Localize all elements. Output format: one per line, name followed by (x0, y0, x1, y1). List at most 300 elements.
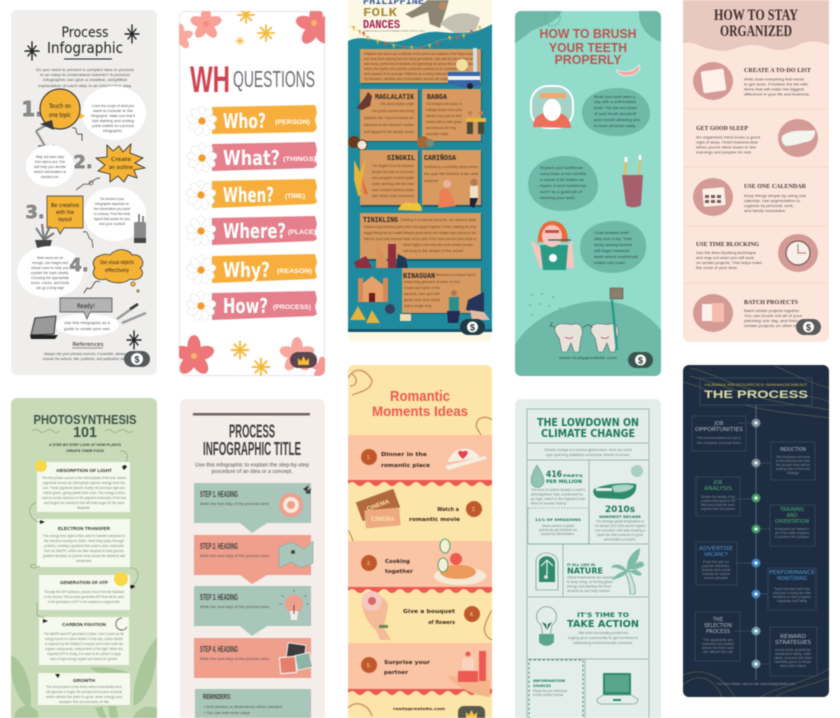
step 3: Write the next step of the process here. (200, 605, 270, 609)
step: performance monitoring: Track how well each new (774, 587, 810, 591)
footer credit: For more details, visit our site www.reallygreatsite.com (717, 682, 795, 686)
item: time blocking: USE TIME BLOCKING (696, 241, 759, 248)
title: how to stay organized: ORGANIZED (720, 23, 792, 40)
step: electron transfer: gradient develops as protons move across the thylakoid wall (43, 554, 125, 558)
step 1 (21, 86, 146, 146)
step: growth: GROWTH (73, 678, 95, 683)
step 1: one topic (49, 112, 71, 119)
step 1: 1. (21, 97, 43, 121)
references: References (72, 342, 104, 348)
badge: crown (290, 352, 317, 368)
step 1: Touch on (48, 103, 71, 110)
box: singkil: people and tells of a princess (372, 170, 414, 174)
item: batch projects: You can knock out all of your (744, 314, 803, 318)
row: why (186, 254, 317, 285)
title: photosynthesis 101: 101 (73, 425, 97, 441)
step: generation of atp: Through the ATP synthase, protons move from the thylakoid (44, 590, 124, 594)
box: intro: and music, performed at festivals and gatherings all across the beautiful islands (364, 62, 476, 66)
step: job analysis: expects from the person (701, 507, 735, 511)
step 2: essential to use. (41, 175, 59, 179)
box: binasuan (402, 268, 490, 323)
item: batch projects: Batch similar projects together. (744, 309, 800, 313)
decor: squiggles (348, 370, 492, 716)
step 1: Learn the scope of what you (92, 104, 134, 108)
node connectors (732, 423, 771, 664)
row: how (186, 291, 317, 321)
box: intro (360, 48, 482, 89)
step: growth: The end product of the fixed carbon eventually turns (46, 685, 122, 689)
step: carbon fixation: sets of high-energy sugars and stored for growth. (50, 657, 118, 661)
it all lies in nature: energy and planting the trees (567, 584, 611, 588)
box: intro: who have been dancing them for many generations, each with its own regional story (364, 57, 476, 61)
row: where: Where? (223, 219, 286, 243)
step: training and orientation: AND (786, 513, 798, 519)
step 1: infographic. Make sure that it (91, 114, 135, 118)
step: job analysis: position that needs to be (701, 499, 735, 503)
step: growth: into glucose or sugar, the primary food source of plants (46, 690, 122, 694)
step: brush twice (582, 88, 650, 136)
stat: 2010s: the decade 2010-2019 was the highest (595, 524, 645, 528)
row dividers (683, 109, 829, 283)
stat: 2010s: The average global temperature in (596, 520, 644, 524)
icon: bearded man (531, 86, 573, 128)
step 1 (194, 483, 311, 533)
it all lies in nature: NATURE (567, 566, 603, 576)
box: binasuan: great care and rarely (404, 298, 440, 302)
box: singkil: SINGKIL (387, 155, 415, 163)
title: philippine folk dances: Traditional dances from the Philippine islands and their stories (363, 30, 426, 32)
step: generation of atp: to the stroma. This process generates ATP that will be used (44, 595, 124, 599)
intro text: explanation of each step in an informative way. (38, 84, 132, 88)
box: singkil: with heavy royal ornaments (372, 194, 414, 198)
timeline spine (755, 405, 757, 680)
step 3: with the (56, 210, 74, 216)
step: the selection process (695, 612, 740, 661)
box: binasuan: spill a single drop (404, 304, 432, 308)
panel: photosynthesis 101 (11, 398, 157, 718)
bunting (350, 26, 481, 51)
information sources: INFORMATION (533, 679, 565, 683)
step: job analysis: Review the details of the (701, 495, 735, 499)
item 4: Give a bouquet (403, 609, 456, 615)
row: how: How? (223, 294, 268, 318)
step: training and orientation: to perform the position (775, 535, 809, 539)
decor: bottom flowers (178, 334, 326, 377)
item 1 band: 1. (367, 455, 371, 461)
step 4: Write the next step of the process here. (200, 657, 270, 661)
subtitle (195, 462, 309, 475)
item: one calendar (693, 178, 806, 216)
step 4: Choosing the appropriate (31, 276, 69, 280)
item 3 band: together (385, 569, 414, 575)
badge: dollar: $ (134, 354, 140, 364)
it all lies in nature: IT ALL LIES IN (567, 562, 595, 567)
item: batch projects: planning one day, and then do (744, 319, 804, 323)
step 4: enough, use images and (32, 261, 68, 265)
step: the selection process: reviewed and tested (702, 642, 734, 646)
background: bottom hill (515, 301, 661, 376)
stat: 2010s: ever recorded, with data showing a (595, 528, 645, 532)
step: generation of atp: in the generation of ATP in the reactions to support later (48, 600, 121, 604)
item 5 band: 5. (367, 663, 371, 669)
it all lies in nature: to keep rising, so turning green (567, 580, 613, 584)
step: clean between teeth: daily once a day. Tooth (594, 237, 632, 241)
item: batch projects: certain projects on other days. (744, 324, 804, 328)
intro text: infographic can give a creative, simplified (43, 78, 127, 82)
step: absorption of light: pigments known as chlorophyll capture energy from the (43, 481, 125, 485)
step 4: Use visual objects (100, 260, 134, 266)
step: carbon fixation: is captured by the RuBisCO enzyme and is then built into (45, 642, 123, 646)
title: process infographic: Process (62, 25, 108, 41)
step: job analysis: JOB (713, 480, 723, 486)
subtitle: Use this infographic to explain the step-by-step (195, 462, 309, 468)
item 4: of flowers (428, 620, 455, 626)
stat: 2010s: rapid rise that continues to grow (597, 533, 643, 537)
step: carbon fixation: energy source for carbon fixation. In this step, carbon dioxide (45, 637, 123, 641)
icon: laptop (597, 673, 638, 704)
item: to-do list: CREATE A TO-DO LIST (744, 67, 812, 74)
box: singkil: The Singkil is from the Maranao (372, 164, 414, 168)
item: good sleep: night of sleep. Finish business-time (696, 140, 758, 144)
box: binasuan: dancers, who spin with (404, 292, 440, 296)
title: how to brush your teeth properly: PROPERLY (554, 52, 622, 67)
box: banga: Kalinga women who carry (426, 108, 462, 112)
panel: philippine folk dances (348, 0, 492, 342)
item: batch projects (693, 294, 804, 332)
reminders box (195, 689, 311, 718)
row: who: Who? (223, 109, 266, 133)
step: electron transfer: membrane. (76, 559, 92, 563)
step: absorption of light: used to excite electrons in the pigment molecules of the leaf (42, 496, 126, 500)
step: job opportunities: OPPORTUNITIES (695, 427, 743, 433)
title: photosynthesis 101: PHOTOSYNTHESIS (34, 412, 137, 427)
step: carbon fixation: organic compounds, independent of the light. When the (45, 647, 123, 651)
stat: 416 ppm: The level of carbon dioxide in earth's (531, 488, 585, 492)
take action: Take action by educating yourself and (578, 631, 628, 635)
step: absorption of light: itself. (77, 506, 91, 510)
box: carinosa: CARIÑOSA (424, 154, 457, 163)
step: advertise vacancy: more people (704, 576, 728, 580)
row: when: (TIME) (285, 194, 305, 200)
title: process infographic: Infographic (47, 39, 123, 57)
item: batch projects: BATCH PROJECTS (744, 299, 798, 306)
step: performance monitoring: regularly and fairly (777, 599, 807, 603)
step: electron transfer: the electron transport chain. Here they pass through (44, 539, 124, 543)
step: training and orientation: ORIENTATION (775, 519, 809, 525)
box: carinosa: handkerchief (424, 179, 438, 183)
step: job analysis: filled and what the team (701, 503, 735, 507)
step: the selection process: are offered the role (703, 650, 733, 654)
closing: ready callout: Ready! (77, 303, 95, 310)
step: induction: to feel welcome and meet (776, 459, 810, 463)
step 3: Be creative (51, 203, 79, 209)
item 2: 2. (472, 507, 476, 513)
take action: IT'S TIME TO (577, 611, 630, 619)
stat: 416 ppm: PER MILLION (546, 479, 582, 485)
step 3: STEP 3. HEADING (200, 593, 238, 602)
title: wh questions (189, 66, 316, 93)
step: the selection process: before the best ones (702, 646, 734, 650)
stat: 2010s: 2010s (605, 505, 635, 515)
stat: 416 ppm: go high, which is the highest it has (531, 497, 585, 501)
title: philippine folk dances: DANCES (363, 18, 400, 32)
step: performance monitoring: employee is doing and offer (773, 591, 812, 595)
step: reward strategies: who earn them (780, 664, 806, 668)
step: electron transfer: The energy from light is then used to transfer electrons to (43, 534, 125, 538)
item: one calendar: and family schedules. (744, 209, 786, 213)
step: advertise vacancy: popular websites, (702, 564, 730, 568)
box: binasuan: heads and hands of the (404, 286, 440, 290)
closing: ready callout (30, 298, 146, 349)
item: to-do list: Write down everything that needs (744, 78, 804, 82)
item: one calendar: calendar. Use segmentation to (744, 199, 800, 203)
leaves (11, 637, 157, 718)
url: reallygreatsite.com (393, 706, 445, 711)
step: replace toothbrush: cleaning your teeth. (540, 196, 576, 200)
badge: dollar: $ (638, 355, 643, 365)
item: good sleep: GET GOOD SLEEP (696, 125, 748, 132)
step: advertise vacancy: ADVERTISE (699, 546, 733, 552)
take action: urging your community to get involved in (568, 636, 638, 640)
item: to-do list: items that will make the biggest (744, 88, 804, 92)
box: tinikling: legged tikling bird as it walks between grass stems and dodges traps placed by rice (364, 231, 476, 235)
header box (700, 378, 812, 405)
step: the selection process: THE (712, 617, 723, 623)
step: carbon fixation: CARBON FIXATION (62, 622, 106, 627)
badge: crown (458, 706, 485, 718)
step: induction: New employees are made (776, 455, 810, 459)
step 4: When words are not (37, 256, 63, 260)
step: training and orientation (770, 505, 815, 546)
stat: 416 ppm (531, 465, 585, 506)
step: performance monitoring: PERFORMANCE (769, 570, 815, 576)
step: job analysis: ANALYSIS (704, 486, 732, 492)
item: time blocking: Use the time-blocking technique (696, 251, 756, 255)
step: absorption of light: ABSORPTION OF LIGHT (56, 468, 113, 473)
step: the selection process: The applicants are (703, 638, 733, 642)
title: process infographic title: PROCESS (229, 422, 275, 442)
item 5 band (348, 643, 492, 697)
title: process infographic title: INFOGRAPHIC TITLE (203, 439, 301, 459)
box: maglalatik (356, 89, 419, 142)
item: time blocking: on certain projects. This helps make (696, 261, 762, 265)
header box: HUMAN RESOURCES MANAGEMENT (704, 383, 809, 387)
step: performance monitoring: MONITORING (777, 576, 807, 582)
box: tinikling: dancing to the delight of the crowd (403, 249, 463, 253)
title: romantic moments ideas: Romantic (390, 388, 450, 405)
step: brush twice: of your brush should fit (594, 112, 636, 116)
step 3: infographic depends on (95, 202, 129, 206)
step 4: effectively (105, 268, 129, 274)
step: induction: the people they will be (776, 463, 810, 467)
title: photosynthesis 101: CREATE THEIR FOOD (66, 448, 104, 453)
step: absorption of light (35, 460, 130, 512)
step 4: can go a long way! (36, 286, 64, 290)
stat: 416 ppm: 416 (546, 470, 562, 480)
step 3: layout that works for you (94, 217, 130, 221)
stat: 2010s: WARMEST DECADE (599, 515, 642, 519)
box: banga (422, 89, 486, 142)
step: clean between teeth: Clean between teeth (594, 231, 629, 235)
step: clean between teeth: teeth where toothbrush (594, 255, 638, 259)
step: carbon fixation (39, 617, 129, 665)
intro text: Climate change is a serious global issue. Here are some (544, 448, 632, 452)
badge: dollar (796, 319, 821, 335)
step: clean between teeth: still linger between (594, 249, 630, 253)
box: maglalatik: and tapped to the steady music (364, 130, 414, 134)
item: one calendar: organize by personal, work, (744, 204, 794, 208)
step: advertise vacancy (696, 542, 737, 585)
step: absorption of light: reflect green, giving plants their color. The energy is then (43, 491, 125, 495)
stat: 2010s (593, 465, 645, 542)
box: maglalatik: This dance depicts a fight (380, 102, 414, 106)
item 3 band (348, 539, 492, 593)
item 2: CINEMA (366, 499, 391, 513)
step 1: has starting and ending (92, 119, 134, 123)
take action (536, 607, 639, 646)
box: maglalatik: Spanish rule. Coconut halves are (364, 116, 414, 120)
box: tinikling: farmers. Each step becomes faster as the pace of the music and the poles begin to (364, 237, 476, 241)
step 4: visual cues to help you (31, 266, 69, 270)
step: reward strategies (770, 627, 817, 676)
step: performance monitoring (768, 568, 816, 610)
step: growth: which allows the plant to grow, store energy and (46, 695, 122, 699)
item 4: 4. (470, 612, 474, 618)
item: one calendar: USE ONE CALENDAR (744, 183, 806, 190)
stat: 11% of emissions: 11% OF EMISSIONS (535, 517, 581, 522)
box: tinikling: Tinikling is a national favourite, the dancers glide (400, 218, 476, 222)
step: carbon fixation: The NADPH and ATP generated in phase 1 and 2 power up the (44, 632, 124, 636)
title: how to stay organized (714, 7, 798, 40)
icon: happy teeth (550, 322, 618, 352)
badge: dollar (628, 352, 653, 368)
stat: 11% of emissions: caused by deforestation. (541, 532, 575, 536)
item 3 band: Cooking (385, 559, 411, 565)
stat: 11% of emissions (528, 508, 589, 544)
item 2 (356, 489, 482, 528)
step: clean between teeth: decay-causing bacteria (594, 243, 632, 247)
step 4: explain the topic clearly. (31, 271, 69, 275)
step: job analysis (696, 477, 740, 516)
step: electron transfer (37, 519, 130, 567)
reminders box: REMINDERS: (203, 694, 231, 701)
step: generation of atp: GENERATION OF ATP (60, 580, 108, 585)
step 2: Create (111, 157, 132, 163)
it all lies in nature: Global temperatures are expected (567, 576, 615, 580)
step 4 (17, 246, 143, 298)
item: time blocking: the most of your time. (696, 266, 738, 270)
illustration: dancers (405, 0, 480, 34)
step: replace toothbrush: frayed. A worn toothbrush (540, 184, 586, 188)
box: intro: where the rhythm and colorful costumes continue to be celebrated today (364, 67, 468, 71)
title: process infographic (25, 25, 139, 60)
item 5 band: partner (384, 670, 409, 676)
box: banga: mountain roads (426, 132, 448, 136)
step: induction: INDUCTION (780, 447, 806, 453)
item: time blocking: and map out when you will work (696, 256, 754, 260)
step: induction (771, 442, 815, 480)
step: performance monitoring: feedback on their progress (773, 595, 811, 599)
step 3 (194, 586, 311, 636)
box: singkil: who escaped a forest quake (372, 176, 414, 180)
icon: arch window (536, 553, 558, 590)
step 2: which information is (34, 170, 66, 174)
step 2 (26, 144, 145, 190)
box: maglalatik: MAGLALATIK (375, 94, 415, 102)
information sources: Please list your references (533, 689, 567, 693)
grid (527, 409, 649, 718)
title: philippine folk dances: FOLK (363, 6, 398, 20)
step 3: the information you want (94, 207, 130, 211)
title: how to brush your teeth properly (540, 26, 636, 67)
row: why: Why? (223, 258, 270, 282)
box: singkil: over crossed bamboo poles (372, 188, 414, 192)
row: what: (THINGS) (283, 157, 316, 163)
step 4: STEP 4. HEADING (200, 645, 238, 654)
box: tinikling: climb higher until only the most nimble remain (403, 243, 473, 247)
item: good sleep: evenings and prepare for rest. (696, 150, 752, 154)
reminders box: • You can add more steps (204, 711, 250, 715)
box: banga: heads with a calm grace (426, 120, 462, 124)
badge: dollar: $ (470, 322, 475, 332)
row: what: What? (223, 146, 280, 170)
step: induction: day (787, 471, 800, 475)
step 1: Write the first step of the process here. (200, 502, 270, 506)
panel: how to brush your teeth (515, 10, 661, 376)
closing: ready callout: guide to create your own (64, 327, 110, 331)
stat: 2010s: and remains a concern. (604, 538, 636, 542)
stat: 11% of emissions: greenhouse gas emissions are (539, 528, 577, 532)
step 2: will help you decide (34, 165, 66, 169)
step 2: Map out each step (36, 155, 64, 159)
item 3 band: 3. (367, 561, 371, 567)
panel: how to stay organized (683, 0, 829, 342)
decor: top flowers (178, 10, 326, 49)
step: training and orientation: all of the skills required (775, 531, 809, 535)
step: brush twice: day with a soft-bristled (594, 100, 636, 104)
step: replace toothbrush: every three or four months (540, 172, 586, 176)
item 4 (362, 591, 480, 640)
step 3: and your content (99, 222, 125, 226)
box: intro: by teachers, families and communities across the region (364, 77, 450, 81)
intro text (36, 68, 134, 88)
box: singkil (354, 150, 419, 207)
intro text: eye-opening statistics everyone needs to know. (546, 453, 630, 457)
header wave (683, 0, 829, 51)
row: who: (PERSON) (275, 120, 310, 126)
step: advertise vacancy: media to reach (702, 572, 730, 576)
step 3: to convey. Find the best (94, 212, 130, 216)
item: to-do list: difference in your life and business. (744, 92, 810, 96)
step 2: from start to end. This (35, 160, 65, 164)
intro text (544, 448, 632, 457)
step: absorption of light: sun. These pigments absorb mostly red and blue light and (43, 486, 125, 490)
step 2 (194, 535, 313, 584)
box: banga: and balance over long (426, 126, 456, 130)
header box: THE PROCESS (704, 389, 808, 401)
illustration: yellow fans (398, 202, 422, 211)
step: growth: sustain the processes of life (59, 700, 109, 704)
step: generation of atp (39, 572, 135, 610)
step: reward strategies: Good work should be (775, 648, 811, 652)
step: carbon fixation: required ATP is ready, it is used to fix carbon in large (47, 652, 121, 656)
item: good sleep (696, 119, 818, 157)
panel: process infographic title (180, 399, 325, 718)
title: climate change: CLIMATE CHANGE (541, 427, 635, 440)
title: how to stay organized: HOW TO STAY (714, 7, 798, 24)
step: electron transfer: proteins, creating a gradient that powers other molecules (44, 544, 124, 548)
references (43, 342, 127, 361)
